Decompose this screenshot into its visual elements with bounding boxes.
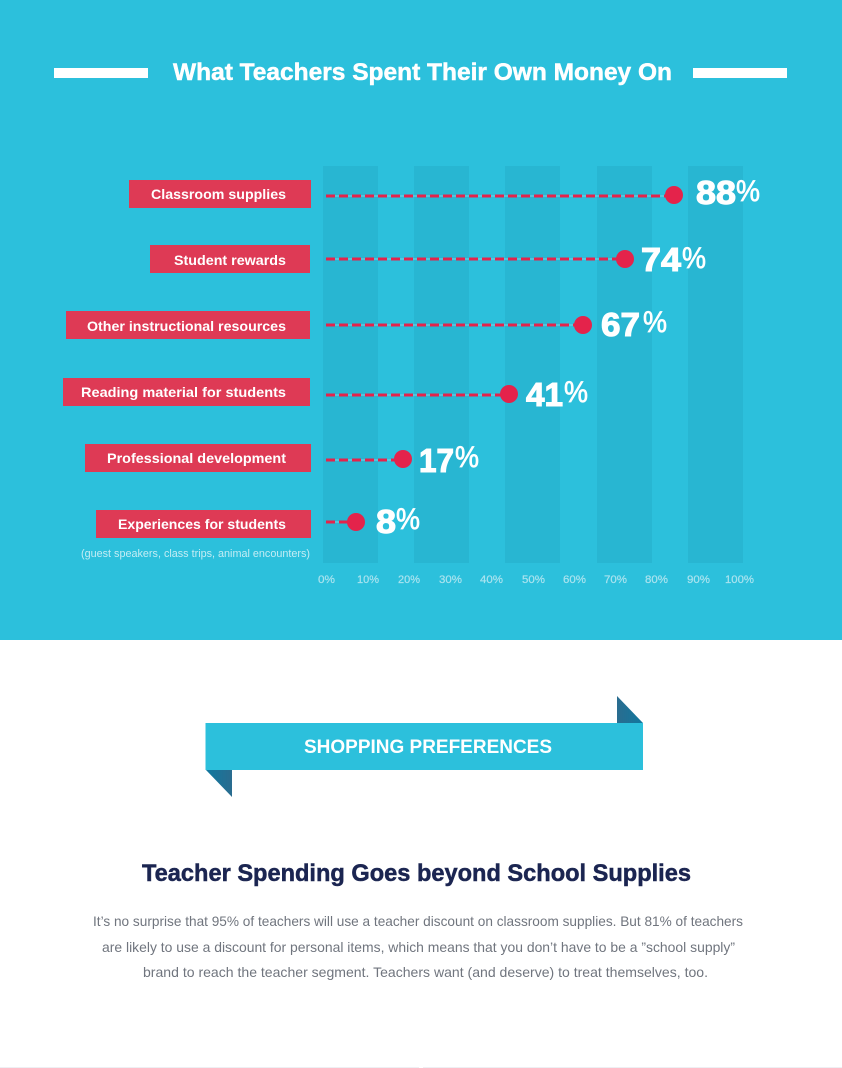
heading: teacher spending: Teacher Spending Goes beyond School Supplies	[142, 860, 691, 887]
panel: teacher spending chart background	[0, 0, 842, 640]
row: experiences for students 8%	[81, 503, 420, 560]
ribbon banner: shopping preferences	[206, 696, 643, 797]
axis labels: 80%	[645, 574, 668, 586]
row: classroom supplies 88%	[129, 174, 760, 211]
row: other instructional resources 67%: 67	[601, 306, 640, 343]
row: professional development 17%: %	[455, 441, 479, 474]
row: experiences for students 8%: 8	[376, 503, 396, 540]
row: student rewards 74%: %	[682, 242, 706, 275]
row: other instructional resources 67%: Other instructional resources	[87, 318, 286, 334]
axis labels: 70%	[604, 574, 627, 586]
row: professional development 17%: 17	[419, 442, 454, 479]
axis labels: 60%	[563, 574, 586, 586]
body paragraph: are likely to use a discount for personal items, which means that you don’t have to be a ”school supply”	[102, 939, 735, 955]
row: student rewards 74%: Student rewards	[174, 252, 286, 268]
row: classroom supplies 88%: %	[736, 175, 760, 208]
row: reading material 41%	[63, 376, 588, 413]
axis labels: 10%	[357, 574, 379, 586]
axis labels: 100%	[725, 574, 754, 586]
row: professional development 17%: Professional development	[107, 450, 286, 466]
row: experiences for students 8%: %	[396, 503, 420, 536]
axis labels: 50%	[522, 574, 545, 586]
footer divider	[0, 1067, 842, 1068]
ribbon banner: shopping preferences: SHOPPING PREFERENCES	[304, 737, 552, 758]
title with side bars	[54, 59, 787, 86]
title with side bars: What Teachers Spent Their Own Money On	[173, 59, 672, 86]
chart column bands	[323, 166, 743, 563]
row: reading material 41%: %	[564, 376, 588, 409]
axis labels: 90%	[687, 574, 710, 586]
axis labels: 30%	[439, 574, 462, 586]
row: other instructional resources 67%	[66, 306, 667, 343]
body paragraph: It’s no surprise that 95% of teachers will use a teacher discount on classroom supplies. But 81% of teachers	[93, 913, 743, 929]
row: student rewards 74%	[150, 241, 706, 278]
row: other instructional resources 67%: %	[643, 306, 667, 339]
chart: percentage spent by category	[63, 166, 760, 586]
axis labels	[318, 574, 754, 586]
row: reading material 41%: Reading material for students	[81, 384, 286, 400]
row: professional development 17%	[85, 441, 479, 479]
axis labels: 40%	[480, 574, 503, 586]
row: classroom supplies 88%: Classroom supplies	[151, 186, 286, 202]
row: student rewards 74%: 74	[641, 241, 682, 278]
row: classroom supplies 88%: 88	[696, 174, 736, 211]
row: experiences for students 8%: (guest speakers, class trips, animal encounters)	[81, 548, 310, 560]
axis labels: 20%	[398, 574, 420, 586]
row: reading material 41%: 41	[526, 376, 563, 413]
row: experiences for students 8%: Experiences for students	[118, 516, 286, 532]
body paragraph: brand to reach the teacher segment. Teachers want (and deserve) to treat themselves, too.	[143, 964, 708, 980]
axis labels: 0%	[318, 574, 335, 586]
body paragraph	[93, 913, 743, 980]
